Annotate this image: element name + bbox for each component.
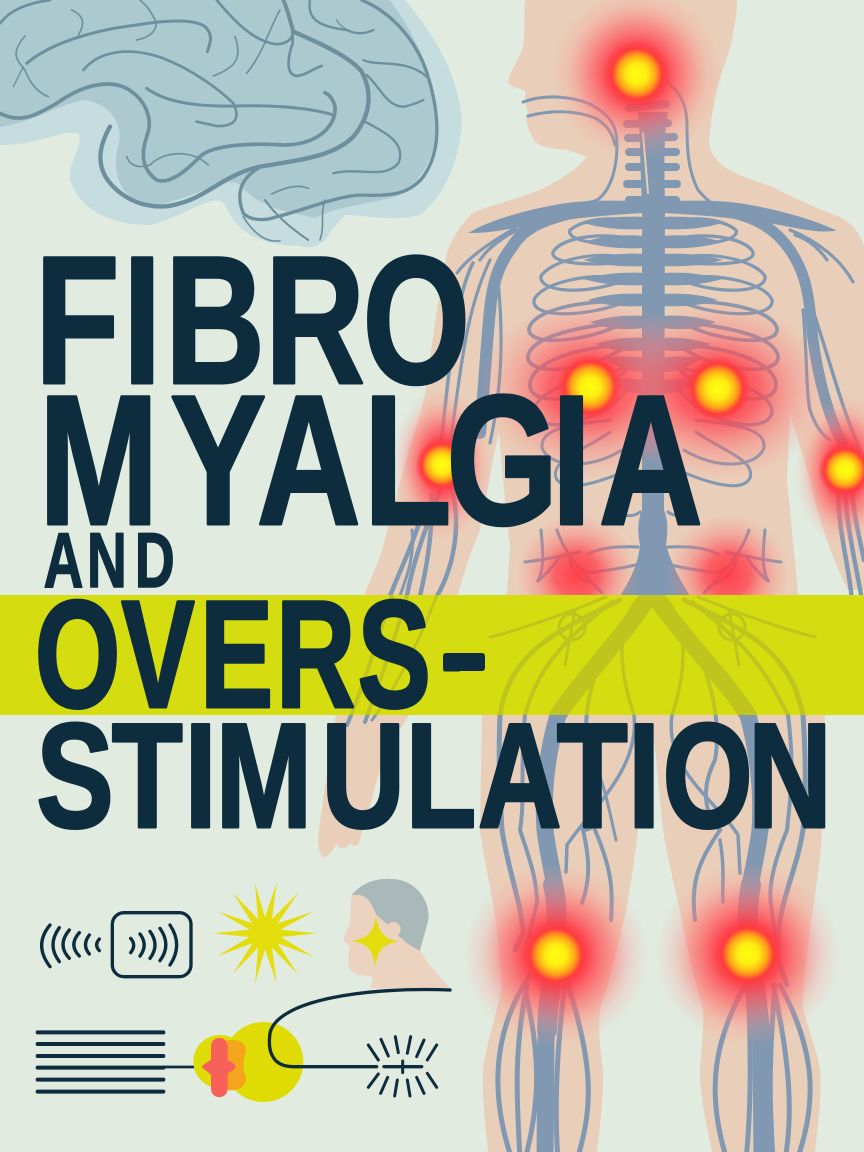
brain illustration	[0, 0, 462, 247]
shoulder nerves	[472, 202, 642, 232]
leg nerves	[346, 715, 813, 1152]
icon: head with facial pain	[343, 879, 450, 988]
nerves and skeleton	[390, 82, 864, 600]
pain glow: left chest	[478, 296, 702, 480]
title line: OVERS-: OVERS	[35, 569, 431, 740]
highlight band	[0, 595, 864, 715]
neck nerves	[523, 82, 718, 207]
icon row	[38, 879, 450, 1102]
human body silhouette	[318, 0, 864, 1152]
pain glow: right knee	[656, 862, 840, 1046]
pain glow: left elbow	[392, 389, 492, 541]
pain glow: neck	[551, 0, 723, 160]
icon: nerve signal diagram	[38, 990, 450, 1102]
cervical vertebrae	[627, 104, 677, 200]
left ribcage	[528, 217, 644, 486]
title line: AND: AND	[44, 518, 175, 604]
forearm nerves	[390, 480, 864, 600]
icon: sound waves entering box	[42, 913, 191, 977]
pain glow: left hip	[515, 513, 639, 637]
pain glow: right hip	[666, 513, 790, 637]
pain glow: right chest	[606, 298, 830, 482]
right ribcage	[662, 217, 778, 486]
pain glow: right elbow	[795, 394, 864, 546]
title line: FIBRO: FIBRO	[35, 220, 470, 422]
pelvic nerves	[525, 512, 781, 593]
title line: MYALGIA: MYALGIA	[39, 358, 703, 564]
icon: bright light starburst	[213, 883, 317, 983]
title	[35, 220, 832, 859]
neck slit	[643, 133, 648, 193]
title line: STIMULATION: STIMULATION	[36, 693, 832, 859]
spine	[620, 112, 690, 596]
title line: OVERS-: -	[442, 614, 461, 703]
pain glow: left knee	[464, 863, 648, 1047]
nerves through band	[349, 595, 816, 715]
